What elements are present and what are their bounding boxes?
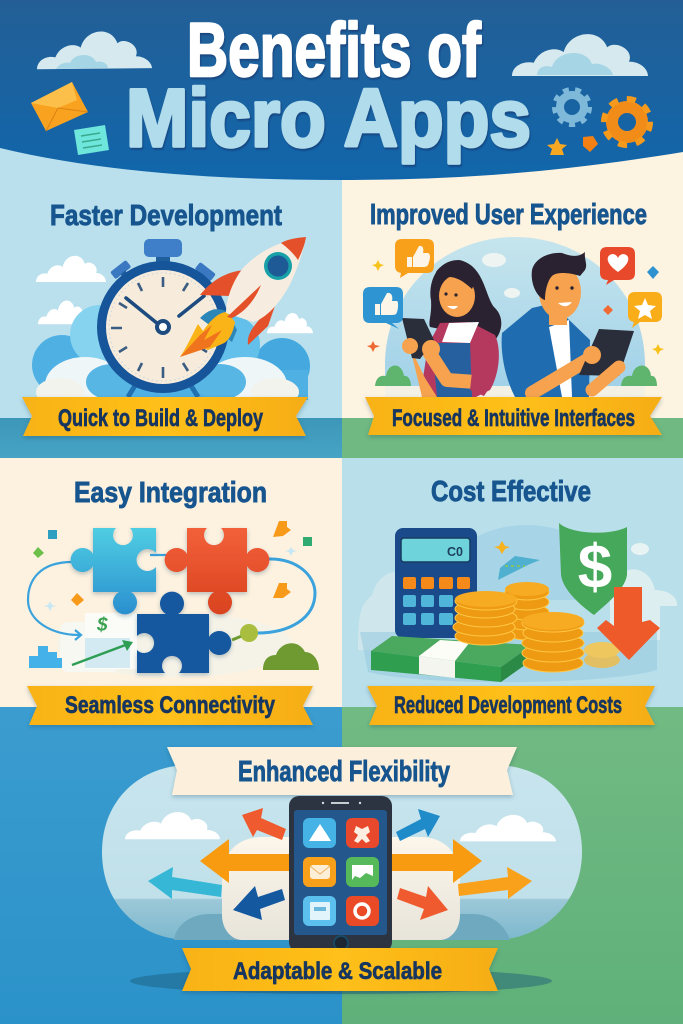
ribbon: Quick to Build & Deploy [58,405,263,432]
icon: envelope [31,82,88,131]
puzzle piece: cyan [71,528,156,614]
icon: blue like bubble [363,287,403,329]
connector arcs [28,555,315,640]
panel: cost effective [358,476,677,725]
puzzle piece: navy [137,592,231,673]
title: Micro Apps [126,73,531,164]
node and green arrow [72,624,258,665]
arrows left [148,808,289,920]
icon: note [74,125,109,155]
heading: Cost Effective [431,476,591,508]
heading: Easy Integration [74,477,267,509]
icon: rocket [180,237,306,357]
icon: coin stacks [453,582,620,672]
icon: star [547,138,567,155]
cream heading banner [167,747,517,795]
heading: Faster Development [50,200,282,232]
icon: calculator [395,528,477,638]
cloud: header right [512,34,648,76]
icon: pentagon [583,136,598,152]
icon: dollar shield: $ [578,533,612,602]
ribbon: Adaptable & Scalable [233,958,442,985]
icon: star bubble [628,292,662,328]
capsule backdrop [102,765,582,940]
man with tablet [502,252,634,397]
bush [263,643,319,670]
panel: improved user experience [363,199,664,435]
sparkle [494,541,510,554]
panel: faster development [22,200,313,436]
icon: stopwatch [97,239,229,397]
cloud: header left [37,31,152,69]
icon: blue gear [554,90,590,124]
cream heading banner: Enhanced Flexibility [238,756,450,788]
ribbon [367,686,655,725]
ribbon [27,686,313,725]
icon: cash stack [371,636,532,682]
icon: orange gear [604,99,650,145]
dome backdrop [375,237,657,398]
app icons [303,818,379,926]
puzzle piece: red [165,528,269,614]
ribbon [365,397,662,435]
shadow ellipse [130,968,552,994]
icon: heart bubble [600,247,635,285]
background clouds [32,256,313,413]
icon: calculator: C0 [447,544,463,559]
panel: enhanced flexibility [102,747,582,994]
header band [0,0,683,180]
arrows right [392,809,532,920]
title: Benefits of [187,8,482,93]
icon: dollar shield [559,523,627,615]
ribbon [182,948,498,991]
sparkles [367,260,664,355]
panel: easy integration [27,477,319,725]
backdrop card and chart: $ [96,615,108,636]
icon: banknote [498,556,540,580]
woman with tablet [402,260,501,397]
icon: down arrow [597,587,660,660]
icon: smartphone [289,796,392,952]
title [126,8,531,164]
ribbon [22,397,308,436]
ribbon: Seamless Connectivity [65,692,276,719]
confetti shapes [33,521,312,611]
backdrop card and chart [29,613,293,677]
backdrop [358,525,677,682]
icon: orange like bubble [395,239,434,278]
clouds [125,812,556,841]
